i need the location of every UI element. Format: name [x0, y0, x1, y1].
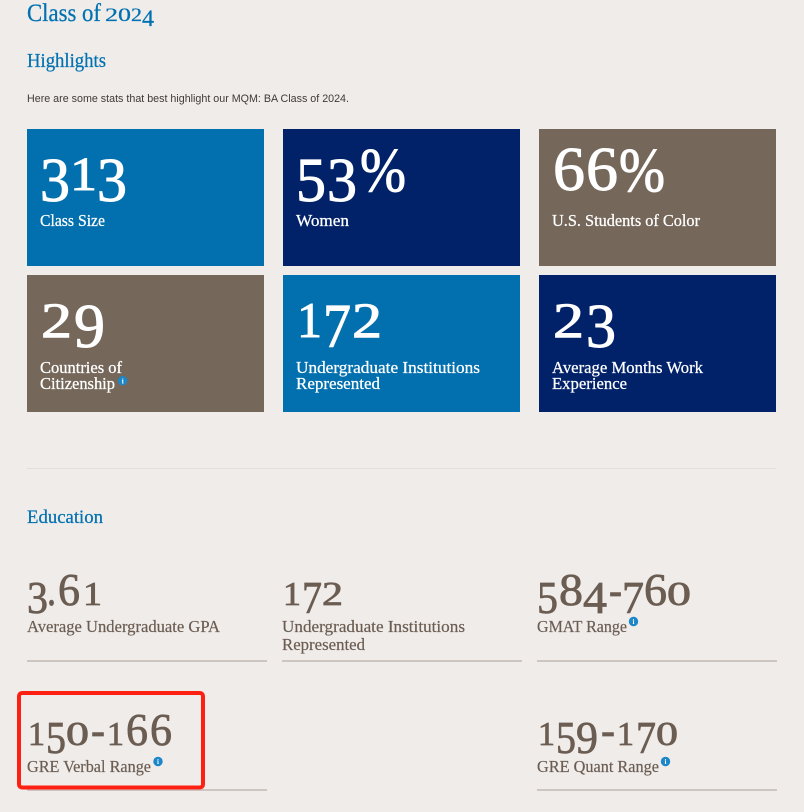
- stat: GRE verbal: 6: [126, 705, 148, 755]
- stat: GRE verbal: -: [91, 705, 105, 755]
- icon: info: [629, 617, 638, 626]
- stat: GRE verbal: 6: [150, 705, 172, 755]
- panel: institutions: 1: [297, 292, 322, 348]
- stat: institutions: 2: [322, 576, 343, 613]
- panel: women: 3: [327, 147, 357, 215]
- intro text: Here are some stats that best highlight our MQM: BA Class of 2024.: [27, 93, 349, 105]
- panel: students of color: [539, 129, 776, 266]
- icon: info: [118, 376, 127, 385]
- panel: work experience: Experience: [552, 374, 627, 393]
- panel: students of color: U.S. Students of Color: [552, 211, 700, 230]
- heading: education: Education: [27, 508, 103, 528]
- panel: work experience: [539, 275, 776, 412]
- panel: countries: [27, 275, 264, 412]
- stat: GRE verbal: 1: [28, 716, 45, 753]
- callout: red highlight box: [19, 693, 203, 788]
- stat: GRE quant: GRE Quant Range: [537, 757, 659, 776]
- panel: institutions: Undergraduate Institutions: [296, 358, 480, 377]
- icon: info: [661, 757, 670, 766]
- stat: GMAT: GMAT Range: [537, 617, 627, 636]
- panel: students of color: 6: [586, 136, 618, 204]
- panel: institutions: 2: [352, 292, 382, 348]
- stat: GRE quant: 0: [656, 716, 678, 753]
- stat: institutions: Undergraduate Institutions: [282, 617, 465, 636]
- panel: class size: 1: [70, 148, 97, 201]
- panel: women: [283, 129, 520, 266]
- stat: GMAT: 7: [622, 573, 644, 623]
- panel: work experience: Average Months Work: [552, 358, 704, 377]
- stat: GPA: 3: [27, 573, 48, 623]
- stat: GRE quant: 7: [636, 713, 656, 763]
- panel: work experience: 2: [553, 292, 584, 348]
- panel: women: Women: [296, 211, 349, 230]
- panel: class size: [27, 129, 264, 266]
- stat: GRE quant: 1: [617, 716, 634, 753]
- stat: GMAT: 6: [644, 565, 667, 615]
- panel: women: %: [360, 137, 406, 205]
- stat: GRE quant: [537, 705, 777, 791]
- icon: info: i: [157, 758, 159, 766]
- stat: GMAT: 5: [537, 573, 558, 623]
- title: 2: [105, 5, 118, 26]
- icon: info: [153, 757, 163, 766]
- stat: GRE verbal: [27, 705, 267, 791]
- stat: GRE quant: 5: [556, 713, 576, 763]
- heading: highlights: Highlights: [27, 51, 106, 72]
- icon: info: i: [633, 618, 635, 626]
- panel: countries: Countries of: [40, 358, 122, 377]
- icon: info: i: [665, 758, 667, 766]
- panel: institutions: 7: [323, 293, 351, 361]
- stat: GPA: [27, 565, 267, 662]
- stat: GMAT: -: [609, 565, 622, 615]
- stat: GRE quant: -: [601, 705, 615, 755]
- stat: GMAT: 4: [583, 573, 607, 623]
- icon: info: i: [122, 377, 124, 385]
- stat: GRE verbal: 1: [107, 716, 124, 753]
- panel: students of color: %: [619, 137, 665, 205]
- stat: GMAT: [537, 565, 777, 662]
- stat: institutions: 7: [302, 573, 322, 623]
- panel: class size: Class Size: [40, 211, 105, 230]
- stat: GPA: 6: [58, 565, 80, 615]
- panel: women: 5: [296, 147, 326, 215]
- panel: countries: 2: [41, 292, 72, 348]
- panel: work experience: 3: [586, 293, 616, 361]
- panel: class size: 3: [40, 147, 70, 215]
- title: Class of: [27, 0, 102, 27]
- stat: GMAT: 8: [559, 565, 583, 615]
- stat: GRE quant: 9: [576, 713, 598, 763]
- panel: institutions: [283, 275, 520, 412]
- panel: students of color: 6: [553, 136, 585, 204]
- stat: GRE verbal: 5: [46, 713, 66, 763]
- stat: GPA: 1: [83, 576, 102, 613]
- stat: GMAT: 0: [667, 576, 691, 613]
- panel: countries: 9: [74, 293, 105, 361]
- stat: GPA: .: [47, 565, 56, 615]
- panel: institutions: Represented: [296, 374, 381, 393]
- stat: GRE verbal: GRE Verbal Range: [27, 757, 151, 776]
- panel: countries: Citizenship: [40, 374, 115, 393]
- panel: class size: 3: [97, 147, 127, 215]
- stat: institutions: [282, 573, 522, 662]
- title: 2: [131, 5, 142, 26]
- stat: institutions: 1: [283, 576, 301, 613]
- stat: GRE quant: 1: [538, 716, 555, 753]
- stat: GPA: Average Undergraduate GPA: [27, 617, 220, 636]
- stat: GRE verbal: 0: [66, 716, 89, 753]
- title: 4: [142, 6, 155, 31]
- stat: institutions: Represented: [282, 635, 366, 654]
- title: 0: [118, 5, 131, 26]
